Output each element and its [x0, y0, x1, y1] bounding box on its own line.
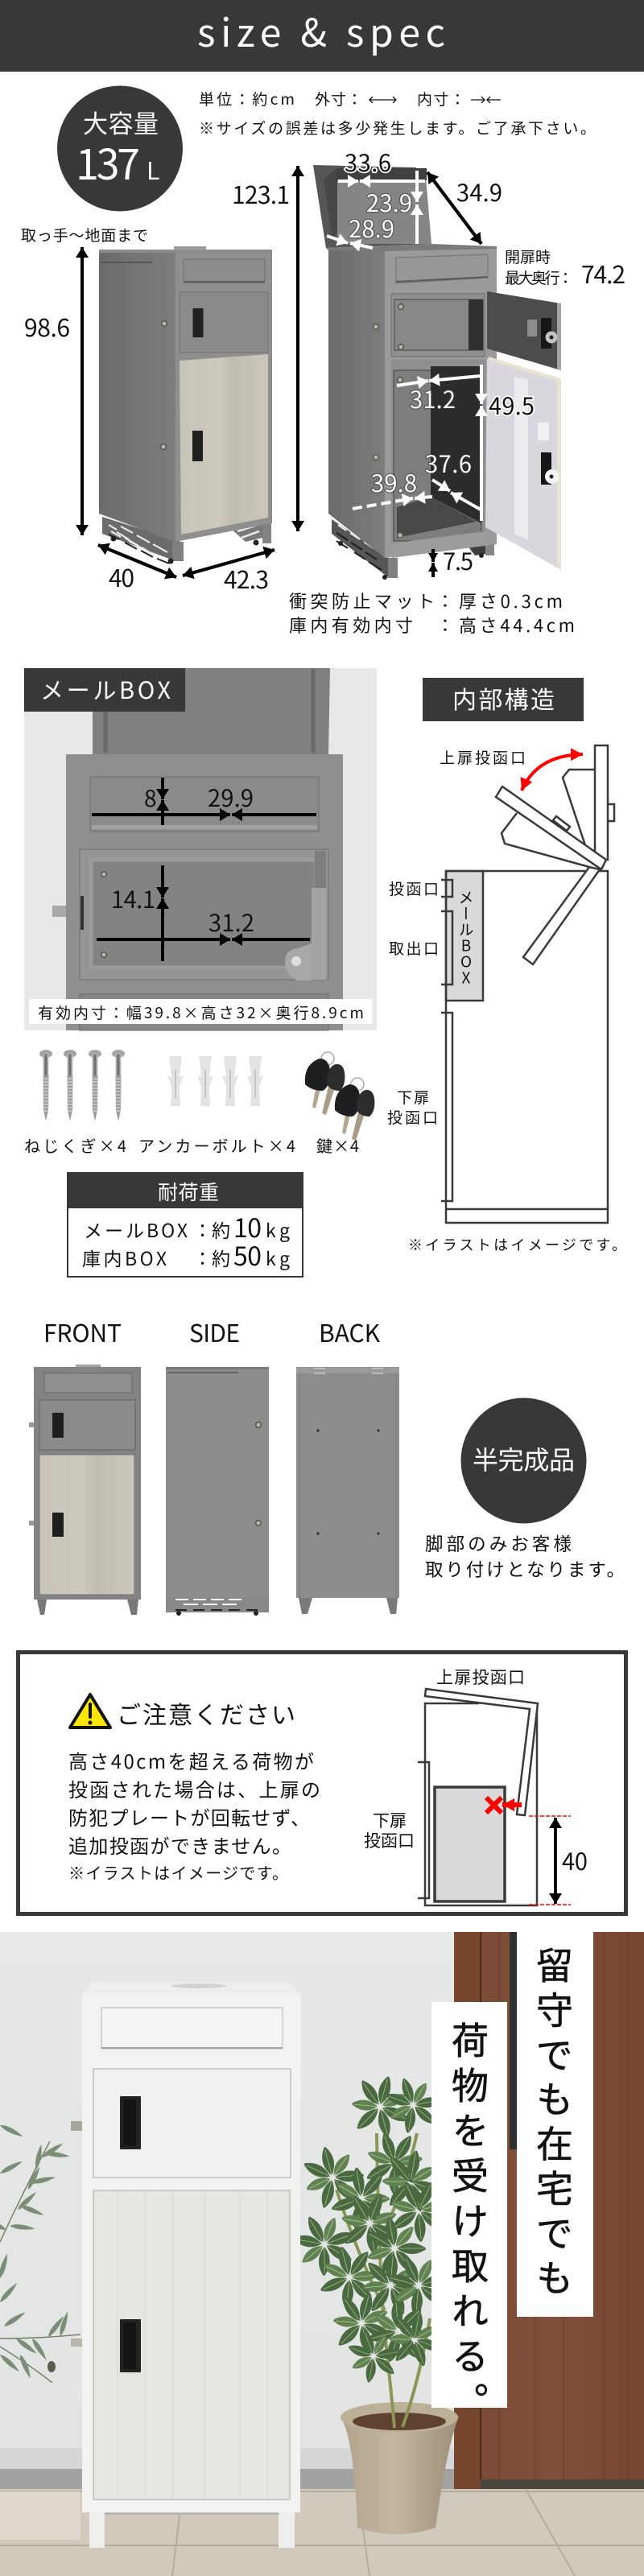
- legs and vents: [332, 519, 388, 577]
- title: size & spec: [197, 2, 445, 58]
- view: back: BACK: [319, 1314, 381, 1349]
- unit legend: 外寸：: [315, 88, 362, 109]
- white box product: [71, 1982, 300, 2548]
- label: can receive parcels: 荷物を受け取れる。: [444, 2021, 497, 2427]
- diagram: oversized parcel: [418, 1689, 571, 1905]
- text: legs assembled by customer: 脚部のみお客様: [425, 1530, 572, 1556]
- diagram: internal structure: [441, 745, 614, 1223]
- door: [454, 1932, 644, 2489]
- closed grey box product: [99, 246, 272, 564]
- diagram labels: 投函口: [389, 877, 439, 899]
- caution text: ※イラストはイメージです。: [68, 1860, 288, 1884]
- view: front: FRONT: [43, 1314, 122, 1349]
- dimension: compartment 14.1 × 31.2: 14.1: [111, 881, 155, 915]
- dimension: depth 40 and width 42.3: 40: [109, 559, 134, 594]
- dimension: lid 33.6 / 23.9 / 28.9 / 34.9: [327, 145, 502, 248]
- notes: mat thickness and inner height: 厚さ0.3cm: [459, 588, 563, 613]
- upper compartment: [391, 294, 485, 357]
- dimension: slot 8 × 29.9: 29.9: [208, 780, 254, 814]
- notes: mat thickness and inner height: [289, 588, 575, 638]
- dimension: slot 8 × 29.9: 8: [144, 782, 157, 814]
- panel: load capacity: 50: [233, 1236, 262, 1274]
- panel: load capacity: [67, 1172, 303, 1277]
- dimension: total height 123.1: 123.1: [232, 175, 290, 211]
- heading: internal structure: [423, 678, 584, 721]
- panel: mail box close-up: 有効内寸：幅39.8×高さ32×奥行8.9cm: [38, 1001, 364, 1023]
- caption: effective inner size: [29, 999, 372, 1024]
- unit legend: 単位：約cm: [199, 88, 295, 109]
- label: whether away or at home: [517, 1932, 593, 2317]
- panel: load capacity: 約: [212, 1216, 230, 1243]
- heading: internal structure: 内部構造: [452, 680, 555, 716]
- dimension: depth 40 and width 42.3: [98, 545, 275, 596]
- dimension: lid 33.6 / 23.9 / 28.9 / 34.9: 28.9: [349, 211, 394, 245]
- view: front: [29, 1314, 141, 1615]
- accessories: screws: [24, 1050, 126, 1157]
- view: back: [296, 1314, 399, 1614]
- dimension: handle to ground 98.6: [21, 224, 148, 535]
- panel: load capacity: 庫内BOX: [82, 1244, 167, 1271]
- unit legend: 内寸：: [417, 88, 465, 109]
- panel: load capacity: 耐荷重: [158, 1177, 219, 1206]
- photo: installed box by the entrance: [0, 1932, 644, 2576]
- panel: load capacity: ：: [193, 1216, 212, 1243]
- diagram labels: ※イラストはイメージです。: [408, 1234, 626, 1255]
- caution text: [68, 1746, 320, 1884]
- badge: semi-assembled: 半完成品: [473, 1440, 575, 1477]
- open grey box product: [313, 165, 561, 580]
- dimension: handle to ground 98.6: 取っ手～地面まで: [21, 224, 148, 246]
- badge: capacity 137L: 大容量: [83, 104, 159, 140]
- caution diagram labels: [364, 1665, 588, 1877]
- panel: mail box close-up: [24, 668, 377, 1030]
- diagram labels: 下扉: [397, 1086, 429, 1108]
- caution diagram labels: 投函口: [364, 1828, 415, 1852]
- diagram labels: メールBOX: [456, 890, 477, 986]
- notes: mat thickness and inner height: 高さ44.4cm: [459, 612, 575, 638]
- label: can receive parcels: [431, 2002, 507, 2427]
- header band: size & spec: [0, 0, 644, 72]
- accessories: keys: [305, 1052, 374, 1157]
- dimension: interior 31.2 / 49.5 / 37.6 / 39.8 / 7.5: 37.6: [425, 446, 472, 480]
- diagram labels: 投函口: [387, 1106, 438, 1128]
- badge: semi-assembled: [460, 1397, 586, 1523]
- dimension: depth 40 and width 42.3: 42.3: [224, 560, 269, 596]
- dimension: slot 8 × 29.9: [92, 778, 316, 825]
- dimension: lid 33.6 / 23.9 / 28.9 / 34.9: 33.6: [345, 145, 391, 179]
- label: max depth when door open 74.2: 最大奥行：: [505, 266, 573, 288]
- label: mail box: [24, 668, 185, 712]
- view: side: [166, 1314, 269, 1616]
- badge: capacity 137L: 137: [76, 131, 140, 192]
- dimension: interior 31.2 / 49.5 / 37.6 / 39.8 / 7.5: [353, 365, 535, 577]
- plant trunk: [336, 2133, 430, 2428]
- panel: mail box close-up: メールBOX: [40, 672, 171, 706]
- caution diagram labels: 上扉投函口: [436, 1665, 525, 1689]
- baseboard and floor: [0, 2448, 644, 2576]
- dimension: lid 33.6 / 23.9 / 28.9 / 34.9: 34.9: [456, 175, 502, 208]
- caution heading: ご注意ください: [117, 1695, 295, 1731]
- panel: load capacity: kg: [266, 1244, 290, 1271]
- notes: mat thickness and inner height: ：: [436, 612, 454, 638]
- caution diagram labels: 40: [562, 1843, 588, 1877]
- panel: load capacity: 約: [212, 1244, 230, 1271]
- dimension: lid 33.6 / 23.9 / 28.9 / 34.9: 23.9: [366, 185, 412, 219]
- label: max depth when door open 74.2: [505, 246, 625, 291]
- caution text: 防犯プレートが回転せず、: [68, 1802, 310, 1831]
- notes: mat thickness and inner height: ：: [436, 588, 454, 613]
- panel: load capacity: ：: [193, 1244, 212, 1271]
- unit legend: ※サイズの誤差は多少発生します。ご了承下さい。: [199, 117, 596, 138]
- caution diagram labels: 下扉: [373, 1808, 407, 1832]
- label: whether away or at home: 留守でも在宅でも: [528, 1946, 581, 2303]
- caution text: 投函された場合は、上扉の: [68, 1774, 320, 1802]
- accessories: keys: 鍵×4: [316, 1133, 359, 1157]
- view: side: SIDE: [189, 1314, 240, 1349]
- badge: capacity 137L: L: [147, 151, 159, 187]
- panel: load capacity: メールBOX: [84, 1216, 188, 1243]
- plant leaves: [284, 2069, 460, 2388]
- lower door open: [485, 358, 561, 570]
- notes: mat thickness and inner height: 衝突防止マット: [289, 588, 435, 613]
- dimension: compartment 14.1 × 31.2: [97, 865, 310, 961]
- dimension: interior 31.2 / 49.5 / 37.6 / 39.8 / 7.5: 7.5: [443, 543, 473, 577]
- panel: load capacity: kg: [266, 1216, 290, 1243]
- badge: capacity 137L: [57, 85, 183, 211]
- accessories: screws: ねじくぎ×4: [24, 1133, 126, 1157]
- dimension: compartment 14.1 × 31.2: 31.2: [208, 905, 254, 939]
- text: legs assembled by customer: 取り付けとなります。: [425, 1556, 625, 1582]
- accessories: anchor bolts: [138, 1056, 295, 1157]
- panel: load capacity: 10: [233, 1208, 262, 1245]
- panel: caution: [18, 1652, 626, 1914]
- diagram labels: 取出口: [389, 937, 439, 959]
- dimension: interior 31.2 / 49.5 / 37.6 / 39.8 / 7.5: 49.5: [489, 388, 535, 422]
- lid: [313, 165, 431, 248]
- accessories: anchor bolts: アンカーボルト×4: [138, 1133, 295, 1157]
- plant pot: [341, 2402, 459, 2534]
- caution text: 追加投函ができません。: [68, 1831, 291, 1859]
- dimension: interior 31.2 / 49.5 / 37.6 / 39.8 / 7.5: 31.2: [410, 382, 456, 415]
- olive branch: [0, 2122, 80, 2383]
- dimension: handle to ground 98.6: 98.6: [24, 308, 70, 344]
- body: [328, 250, 385, 558]
- diagram labels: 上扉投函口: [440, 746, 526, 768]
- text: legs assembled by customer: [425, 1530, 625, 1582]
- unit legend: [199, 88, 596, 138]
- upper door open: [487, 291, 561, 370]
- label: max depth when door open 74.2: 74.2: [581, 255, 625, 291]
- lower compartment: [391, 360, 485, 543]
- label: max depth when door open 74.2: 開扉時: [505, 246, 551, 267]
- diagram labels: [387, 746, 626, 1255]
- dimension: interior 31.2 / 49.5 / 37.6 / 39.8 / 7.5: 39.8: [371, 465, 417, 499]
- notes: mat thickness and inner height: 庫内有効内寸: [289, 612, 413, 638]
- icon: warning triangle: [70, 1695, 110, 1728]
- caution text: 高さ40cmを超える荷物が: [68, 1746, 314, 1774]
